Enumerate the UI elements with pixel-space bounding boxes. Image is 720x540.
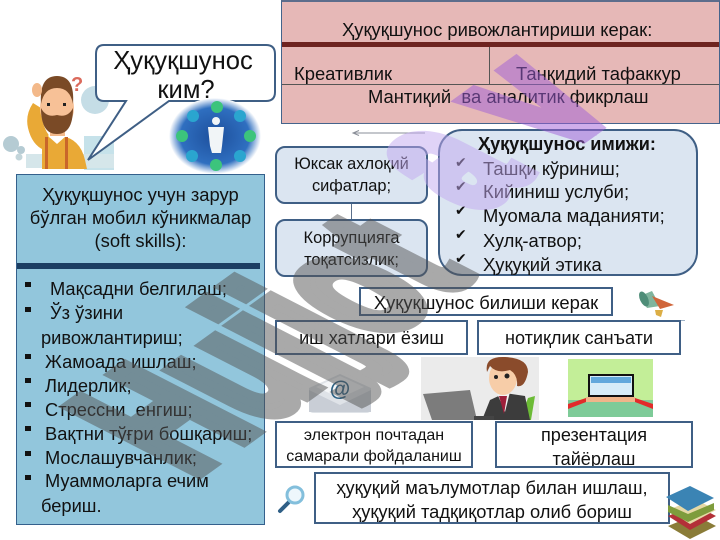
illustration: man with laptop <box>421 357 539 420</box>
box: effective email use: электрон почтадан <box>304 427 444 444</box>
speech bubble: who is a lawyer: Ҳуқуқшунос <box>113 47 253 75</box>
heading: soft skills <box>30 184 251 251</box>
list: soft skills items: Муаммоларга ечим <box>45 470 209 491</box>
box: legal information and research: ҳуқуқий тадқиқотлар олиб бориш <box>352 501 632 522</box>
panel: lawyer should develop <box>281 0 720 124</box>
icon: stack of books <box>666 486 716 539</box>
list: image items: ✔ <box>455 178 467 194</box>
list: image items: ✔ <box>455 154 467 170</box>
box: oratory: нотиқлик санъати <box>505 328 653 348</box>
icon: soft skills wheel <box>170 98 260 174</box>
list: image items: Хулқ-атвор; <box>483 230 582 251</box>
box: oratory <box>477 320 681 355</box>
box: preparing a presentation: презентация <box>541 425 647 445</box>
box: legal information and research: ҳуқуқий маълумотлар билан ишлаш, <box>336 477 648 498</box>
watermark: a <box>308 87 572 234</box>
speech bubble: who is a lawyer <box>87 44 276 161</box>
list: soft skills items <box>25 278 252 516</box>
box: writing business letters <box>275 320 468 355</box>
box: lawyer must know <box>359 287 613 316</box>
list: image items: Кийиниш услуби; <box>483 181 629 202</box>
cell: critical thinking: Танқидий тафаккур <box>516 63 681 84</box>
list: image items: ✔ <box>455 202 467 218</box>
icon: megaphone <box>639 291 674 317</box>
list: image items: Ҳуқуқий этика <box>483 254 602 275</box>
list: soft skills items: Мақсадни белгилаш; <box>50 278 227 299</box>
list: soft skills items: Стрессни енгиш; <box>45 399 193 420</box>
list: image items: Муомала маданияти; <box>483 205 665 226</box>
box: high moral qualities: сифатлар; <box>312 176 391 194</box>
list: soft skills items: Вақтни тўғри бошқариш; <box>45 423 252 444</box>
list: soft skills items: Ўз ўзини <box>50 302 123 323</box>
cell: creativity: Креативлик <box>294 63 392 84</box>
icon: email envelope <box>309 374 371 413</box>
list: soft skills items: Лидерлик; <box>45 375 132 396</box>
illustration: thinking man: ? <box>71 74 83 96</box>
list: image items: ✔ <box>455 250 467 266</box>
heading: soft skills: бўлган мобил кўникмалар <box>30 207 251 228</box>
icon: email envelope: @ <box>330 378 350 401</box>
row: logical and analytical thinking: Мантиқий ва аналитик фикрлаш <box>368 86 649 107</box>
speech bubble: who is a lawyer: ким? <box>157 76 215 104</box>
box: preparing a presentation <box>495 421 693 468</box>
heading: soft skills: (soft skills): <box>95 230 186 251</box>
watermark: v <box>394 26 656 172</box>
list: image items: ✔ <box>455 226 467 242</box>
icon: magnifier <box>278 486 304 514</box>
panel: soft skills <box>16 174 265 525</box>
heading: lawyer image: Ҳуқуқшунос имижи: <box>478 134 656 154</box>
box: intolerance of corruption: Коррупцияга <box>304 229 399 247</box>
watermark: Hujjot <box>23 188 513 499</box>
heading: lawyer should develop: Ҳуқуқшунос ривожлантириши керак: <box>342 19 652 40</box>
connector line <box>351 203 352 220</box>
list: image items: Ташқи кўриниш; <box>483 158 620 179</box>
box: effective email use <box>275 421 473 468</box>
list: soft skills items: Мослашувчанлик; <box>45 447 197 468</box>
box: high moral qualities <box>275 146 428 204</box>
heading: soft skills: Ҳуқуқшунос учун зарур <box>42 184 239 205</box>
panel: lawyer image <box>438 129 698 276</box>
box: legal information and research <box>314 472 670 524</box>
box: effective email use: самарали фойдаланиш <box>286 448 462 465</box>
list: soft skills items: Жамоада ишлаш; <box>45 351 197 372</box>
box: lawyer must know: Ҳуқуқшунос билиши керак <box>374 292 598 313</box>
illustration: thinking man <box>3 74 114 170</box>
box: high moral qualities: Юксак ахлоқий <box>294 155 409 173</box>
box: intolerance of corruption: тоқатсизлик; <box>304 250 399 268</box>
list: soft skills items: ривожлантириш; <box>41 327 183 348</box>
list: soft skills items: бериш. <box>41 495 102 516</box>
box: writing business letters: иш хатлари ёзиш <box>299 328 444 348</box>
box: intolerance of corruption <box>275 219 428 277</box>
illustration: presentation room <box>568 359 653 417</box>
list: image items <box>455 154 665 275</box>
